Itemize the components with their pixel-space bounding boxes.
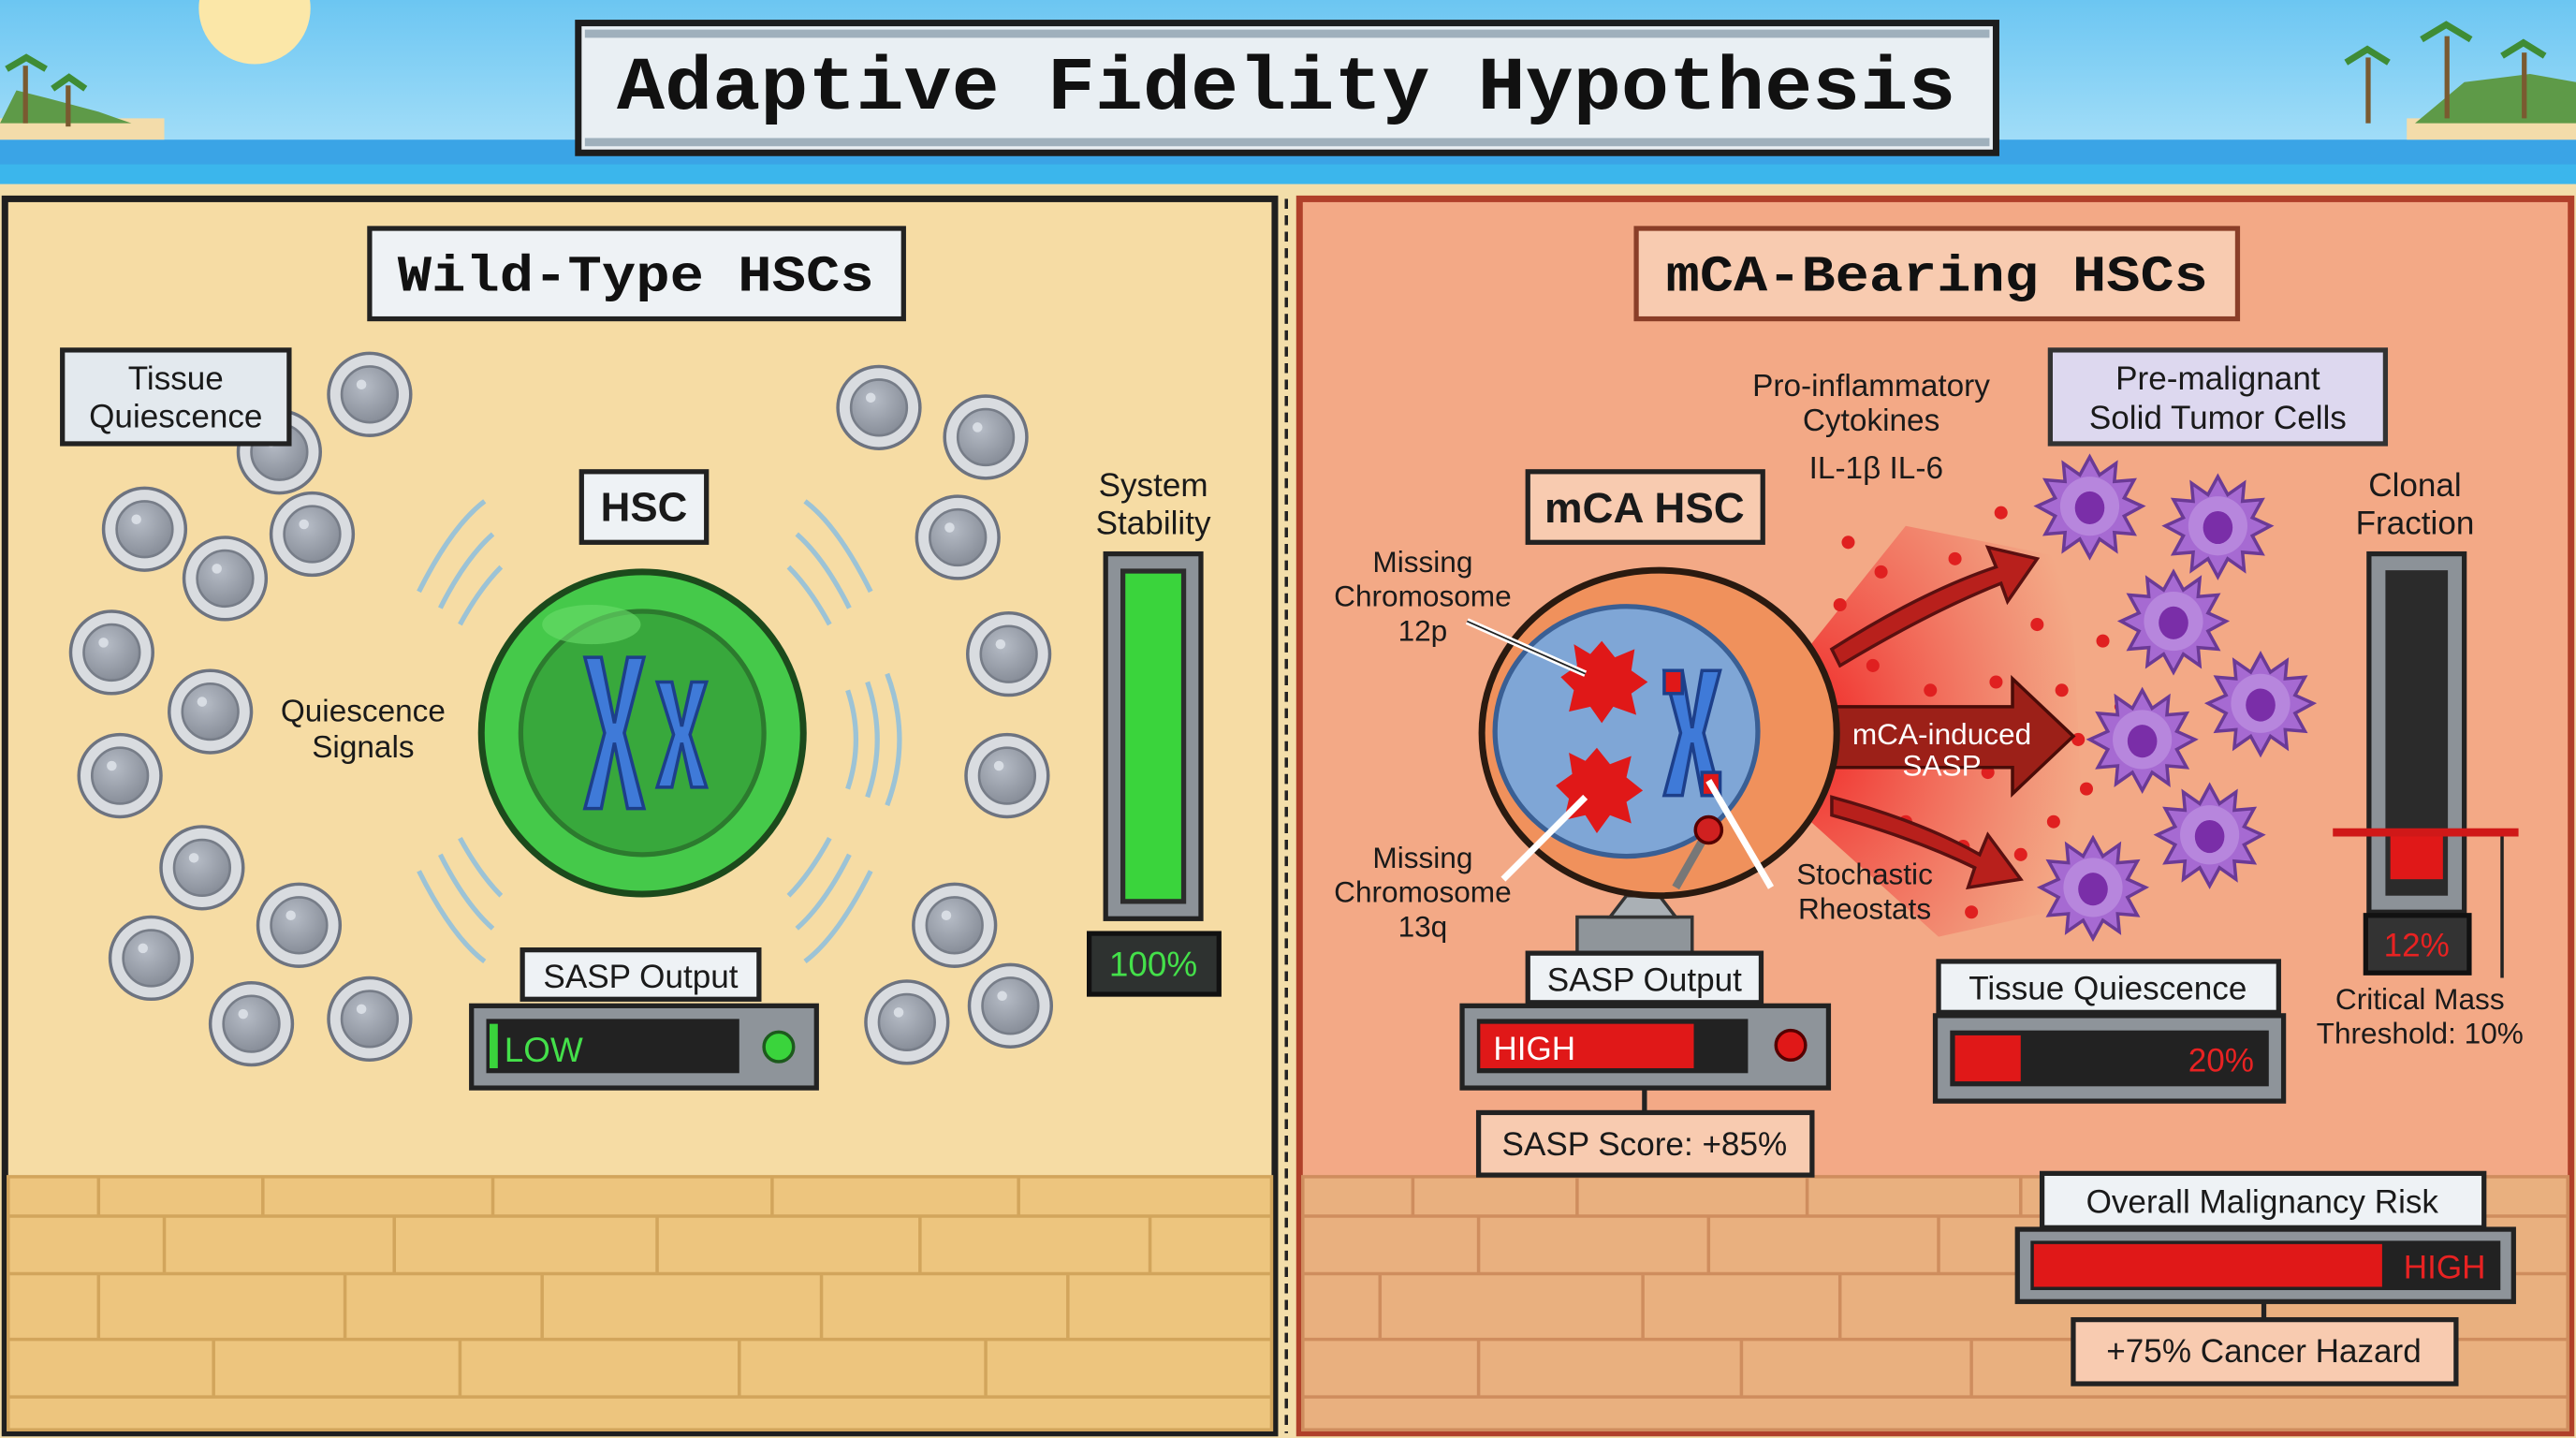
callouts: chromosome labels: Rheostats bbox=[1798, 891, 1931, 925]
gauge: SASP output high bbox=[1462, 953, 1828, 1175]
bricks bbox=[1303, 1177, 2568, 1430]
callouts: chromosome labels: Chromosome bbox=[1334, 875, 1512, 909]
callouts: chromosome labels bbox=[1334, 545, 1933, 944]
label: pre-malignant solid tumor cells bbox=[2050, 350, 2385, 444]
label: Quiescence Signals bbox=[281, 695, 446, 765]
callouts: chromosome labels: Stochastic bbox=[1796, 857, 1933, 890]
gauge: SASP output low: LOW bbox=[505, 1031, 583, 1069]
gauge: overall malignancy risk: HIGH bbox=[2404, 1250, 2485, 1286]
label: Tissue Quiescence: Tissue bbox=[128, 360, 224, 397]
label: HSC: HSC bbox=[601, 484, 687, 530]
gauge: overall malignancy risk bbox=[2017, 1173, 2513, 1384]
tumor cells bbox=[2037, 457, 2313, 938]
label: pro-inflammatory cytokines: Cytokines bbox=[1803, 404, 1939, 438]
gauge: tissue quiescence: Tissue Quiescence bbox=[1969, 970, 2247, 1006]
label: HSC bbox=[581, 472, 707, 542]
callouts: chromosome labels: Missing bbox=[1372, 841, 1472, 874]
gauge: tissue quiescence bbox=[1936, 961, 2284, 1101]
label: Tissue Quiescence: Quiescence bbox=[89, 398, 262, 434]
gauge: overall malignancy risk: Overall Malignancy Risk bbox=[2086, 1184, 2438, 1221]
gauge: system stability: 100% bbox=[1109, 946, 1197, 984]
heading: Wild-Type HSCs: Wild-Type HSCs bbox=[398, 250, 874, 307]
gauge: clonal fraction bbox=[2317, 467, 2524, 1050]
heading: Wild-Type HSCs bbox=[370, 228, 903, 319]
label: pre-malignant solid tumor cells: Solid Tumor Cells bbox=[2089, 400, 2347, 436]
icon: sun bbox=[198, 0, 311, 64]
SASP spray cone bbox=[1775, 506, 2124, 937]
label: pro-inflammatory cytokines: IL-1β IL-6 bbox=[1809, 451, 1943, 486]
gauge: SASP output high: HIGH bbox=[1493, 1031, 1575, 1067]
gauge: clonal fraction: Threshold: 10% bbox=[2317, 1017, 2524, 1050]
label: Quiescence Signals: Signals bbox=[312, 730, 415, 765]
label: mCA HSC: mCA HSC bbox=[1544, 484, 1745, 532]
callouts: chromosome labels: Chromosome bbox=[1334, 580, 1512, 613]
panel: wild-type HSCs bbox=[5, 198, 1275, 1433]
bricks bbox=[8, 1177, 1271, 1430]
panel: mCA-bearing HSCs bbox=[1299, 198, 2571, 1433]
arrow: mCA-induced SASP: mCA-induced bbox=[1852, 717, 2031, 751]
label: Tissue Quiescence bbox=[63, 350, 289, 444]
callouts: chromosome labels: 12p bbox=[1398, 614, 1447, 648]
icon: right island bbox=[2346, 24, 2576, 139]
gauge: clonal fraction: Critical Mass bbox=[2335, 982, 2505, 1016]
label: mCA HSC bbox=[1528, 472, 1763, 542]
arrow: mCA-induced SASP bbox=[1832, 679, 2073, 794]
icon: mCA HSC cell bbox=[1482, 570, 1837, 953]
gauge: clonal fraction: Clonal bbox=[2368, 467, 2462, 504]
label: pre-malignant solid tumor cells: Pre-malignant bbox=[2115, 360, 2320, 397]
divider bbox=[1285, 198, 1287, 1433]
gauge: SASP output low bbox=[472, 950, 816, 1088]
label: Quiescence Signals: Quiescence bbox=[281, 695, 446, 729]
gauge: clonal fraction: 12% bbox=[2384, 928, 2450, 964]
icon: green HSC cell with chromosomes bbox=[481, 572, 803, 894]
quiescent gray cells bbox=[70, 353, 1051, 1065]
gauge: tissue quiescence: 20% bbox=[2188, 1043, 2254, 1079]
gauge: SASP output high: SASP Output bbox=[1547, 962, 1742, 999]
gauge: clonal fraction: Fraction bbox=[2356, 506, 2474, 542]
icon: left island bbox=[0, 57, 165, 139]
title: Adaptive Fidelity Hypothesis bbox=[617, 47, 1955, 132]
arrow: mCA-induced SASP: SASP bbox=[1902, 749, 1982, 783]
gauge: SASP output low: SASP Output bbox=[543, 959, 739, 995]
gauge: system stability: System bbox=[1099, 467, 1208, 504]
title bbox=[578, 23, 1996, 153]
callouts: chromosome labels: Missing bbox=[1372, 545, 1472, 579]
callouts: chromosome labels: 13q bbox=[1398, 910, 1447, 944]
label: pro-inflammatory cytokines bbox=[1752, 369, 1990, 486]
signal arcs bbox=[419, 501, 900, 961]
gauge: overall malignancy risk: +75% Cancer Hazard bbox=[2106, 1333, 2422, 1370]
gauge: system stability bbox=[1090, 467, 1219, 994]
heading: mCA-Bearing HSCs: mCA-Bearing HSCs bbox=[1666, 250, 2208, 307]
label: pro-inflammatory cytokines: Pro-inflammatory bbox=[1752, 369, 1990, 404]
arrows: SASP spread bbox=[1832, 548, 2037, 888]
gauge: SASP output high: SASP Score: +85% bbox=[1502, 1126, 1787, 1163]
heading: mCA-Bearing HSCs bbox=[1636, 228, 2237, 319]
gauge: system stability: Stability bbox=[1096, 506, 1211, 542]
